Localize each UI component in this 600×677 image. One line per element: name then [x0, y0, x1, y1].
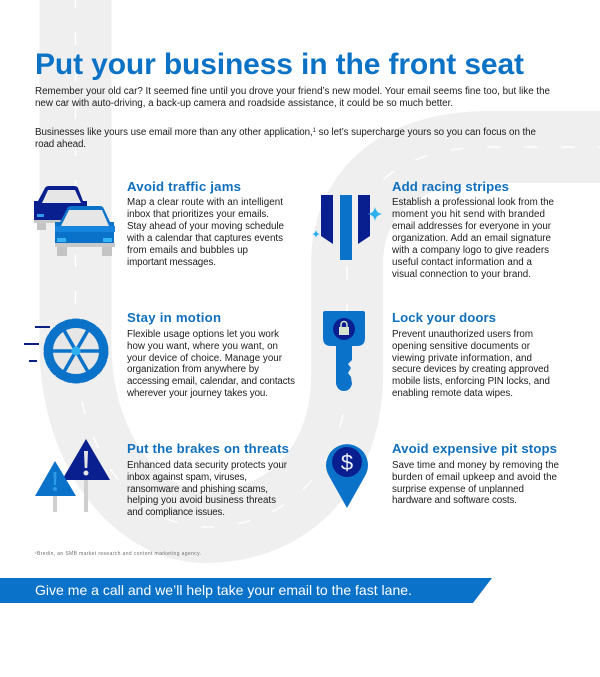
heading: Put the brakes on threats [127, 441, 289, 456]
body text: organization. Add an email signature [392, 233, 552, 244]
panel: add racing stripes [312, 179, 555, 280]
icon: warning signs [35, 439, 110, 512]
body text [392, 460, 560, 506]
call to action banner: Give me a call and we’ll help take your email to the fast lane. [35, 582, 412, 598]
title: Put your business in the front seat [35, 48, 524, 81]
body text [126, 329, 295, 399]
body text: Flexible usage options let you work [127, 329, 279, 340]
body text: burden of email upkeep and avoid the [392, 472, 558, 483]
body text: important messages. [127, 257, 216, 268]
body text: Save time and money by removing the [392, 460, 560, 471]
body text [391, 197, 555, 280]
body text: inbox that prioritizes your emails. [127, 209, 269, 220]
footnote: ¹Bredin, an SMB market research and content marketing agency. [35, 551, 201, 557]
body text: helping you avoid business threats [127, 495, 276, 506]
icon: two cars [34, 186, 115, 256]
icon: map pin with dollar [326, 444, 368, 508]
body text: secure devices by creating approved [392, 364, 549, 375]
intro paragraph 2 [35, 127, 537, 150]
body text: Stay ahead of your moving schedule [127, 221, 285, 232]
body text: enabling remote data wipes. [392, 388, 513, 399]
body text: hardware and software costs. [392, 495, 517, 506]
body text: your device of choice. Manage your [127, 353, 283, 364]
body text: email addresses for everyone in your [392, 221, 552, 232]
intro paragraph 2: 1 [313, 128, 317, 134]
icon: racing stripes [312, 195, 382, 260]
body text: organization from anywhere by [127, 364, 259, 375]
panel: put the brakes on threats [35, 439, 289, 518]
body text: inbox against spam, viruses, [127, 472, 247, 483]
heading: Stay in motion [127, 310, 221, 325]
panel: avoid expensive pit stops [326, 441, 560, 508]
body text: visual connection to your brand. [392, 269, 531, 280]
body text: how you want, where you want, on [127, 341, 278, 352]
body text: from emails and bubbles up [127, 245, 249, 256]
panel: lock your doors [323, 310, 550, 399]
intro paragraph 1: Remember your old car? It seemed fine until you drove your friend’s new model. Your email seems fine too, but like the [35, 86, 551, 97]
panel: stay in motion [24, 310, 295, 399]
intro paragraph 2: Businesses like yours use email more than any other application, [35, 127, 313, 138]
intro paragraph 1: new car with auto-driving, a back-up camera and roadside assistance, it could be so much better. [35, 98, 453, 109]
icon: wheel with motion lines [24, 320, 108, 382]
body text: Enhanced data security protects your [127, 460, 288, 471]
body text: useful contact information and a [392, 257, 533, 268]
heading: Avoid expensive pit stops [392, 441, 557, 456]
body text: surprise expense of unplanned [392, 484, 524, 495]
intro paragraph 2: road ahead. [35, 139, 86, 150]
road background [76, 0, 600, 527]
body text: wherever your journey takes you. [126, 388, 268, 399]
icon: map pin with dollar: $ [341, 450, 353, 475]
icon: key with padlock [323, 311, 365, 391]
body text: with a company logo to give readers [391, 245, 549, 256]
body text [126, 197, 285, 268]
body text: Prevent unauthorized users from [392, 329, 533, 340]
body text [127, 460, 288, 518]
body text: ransomware and phishing scams, [127, 484, 268, 495]
body text: mobile lists, enforcing PIN locks, and [392, 376, 550, 387]
body text: Establish a professional look from the [392, 197, 555, 208]
body text: accessing email, calendar, and contacts [127, 376, 295, 387]
panel: avoid traffic jams [34, 179, 285, 268]
intro paragraph 1 [35, 86, 551, 109]
heading: Add racing stripes [392, 179, 509, 194]
body text: viewing private information, and [392, 353, 532, 364]
heading: Lock your doors [392, 310, 496, 325]
body text: with a calendar that captures events [126, 233, 283, 244]
body text [392, 329, 550, 399]
body text: Map a clear route with an intelligent [127, 197, 283, 208]
body text: and compliance issues. [127, 507, 225, 518]
heading: Avoid traffic jams [127, 179, 241, 194]
body text: moment you hit send with branded [392, 209, 545, 220]
body text: opening sensitive documents or [392, 341, 531, 352]
call to action banner [0, 578, 492, 603]
intro paragraph 2: so let’s supercharge yours so you can focus on the [316, 127, 537, 138]
